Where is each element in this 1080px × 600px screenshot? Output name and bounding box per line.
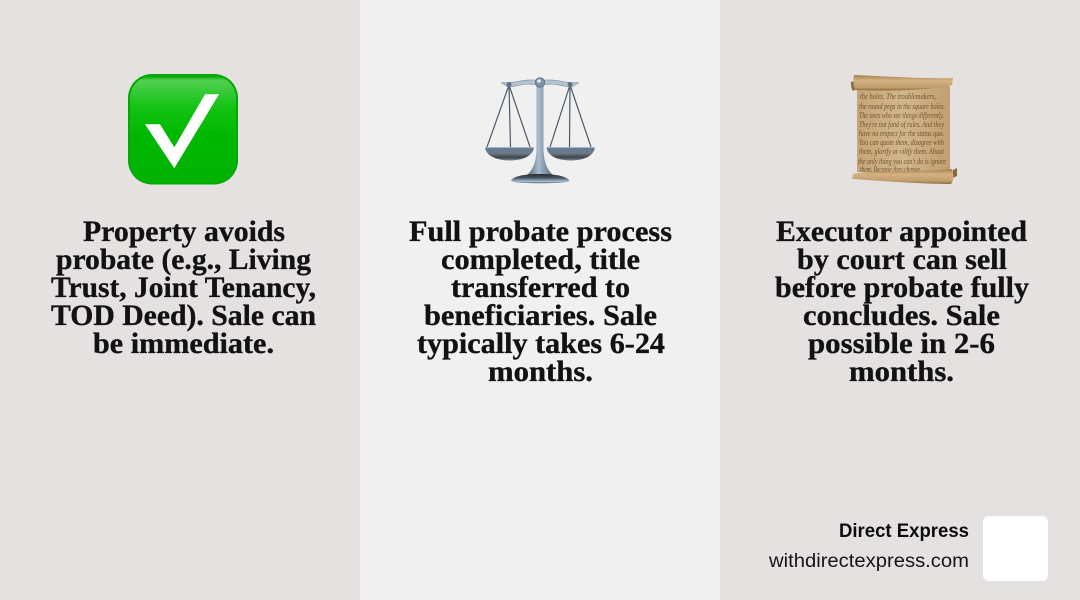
brand url: withdirectexpress.com [768, 551, 969, 572]
heading: panel 3 text: Executor appointed [776, 215, 1027, 248]
icon: parchment scroll [851, 75, 957, 184]
icon: parchment scroll: The ones who see things differently. [859, 110, 944, 120]
icon: parchment scroll: You can quote them, disagree with [859, 137, 944, 147]
heading: panel 3 text: by court can sell [797, 243, 1007, 276]
icon: green check mark [128, 74, 238, 184]
heading: panel 3 text: before probate fully [775, 271, 1029, 304]
heading: panel 1 text: Property avoids [83, 215, 285, 248]
icon: parchment scroll: them. Because they change [860, 164, 920, 174]
heading: panel 3 text: months. [849, 355, 954, 388]
heading: panel 1 text: be immediate. [93, 327, 274, 360]
icon: parchment scroll: have no respect for the status quo. [859, 128, 944, 138]
panel: executor sale [720, 0, 1080, 600]
heading: panel 3 text: concludes. Sale [803, 299, 1000, 332]
icon: parchment scroll: They're not fond of rules. And they [859, 119, 944, 129]
heading: panel 2 text: typically takes 6-24 [417, 327, 665, 360]
heading: panel 3 text [775, 215, 1029, 388]
icon: parchment scroll: them, glorify or vilify them. About [859, 146, 944, 156]
heading: panel 2 text: completed, title [441, 243, 640, 276]
panel: no probate required [0, 0, 360, 600]
icon: parchment scroll: the only thing you can't do is ignore [858, 156, 946, 166]
heading: panel 3 text: possible in 2-6 [808, 327, 995, 360]
icon: parchment scroll: the holes. The troublemakers, [860, 91, 936, 101]
heading: panel 1 text [51, 215, 316, 360]
heading: panel 2 text: beneficiaries. Sale [424, 299, 657, 332]
heading: panel 2 text [409, 215, 672, 388]
heading: panel 2 text: months. [488, 355, 593, 388]
panel: full probate [360, 0, 720, 600]
logo placeholder [983, 516, 1048, 581]
icon: balance scales [485, 78, 595, 183]
heading: panel 2 text: Full probate process [409, 215, 672, 248]
heading: panel 1 text: TOD Deed). Sale can [51, 299, 316, 332]
icon: parchment scroll: the round pegs in the square holes. [859, 101, 945, 111]
brand name: Direct Express [839, 521, 969, 542]
heading: panel 2 text: transferred to [451, 271, 630, 304]
heading: panel 1 text: Trust, Joint Tenancy, [51, 271, 316, 304]
heading: panel 1 text: probate (e.g., Living [56, 243, 311, 276]
brand footer [768, 516, 1048, 581]
